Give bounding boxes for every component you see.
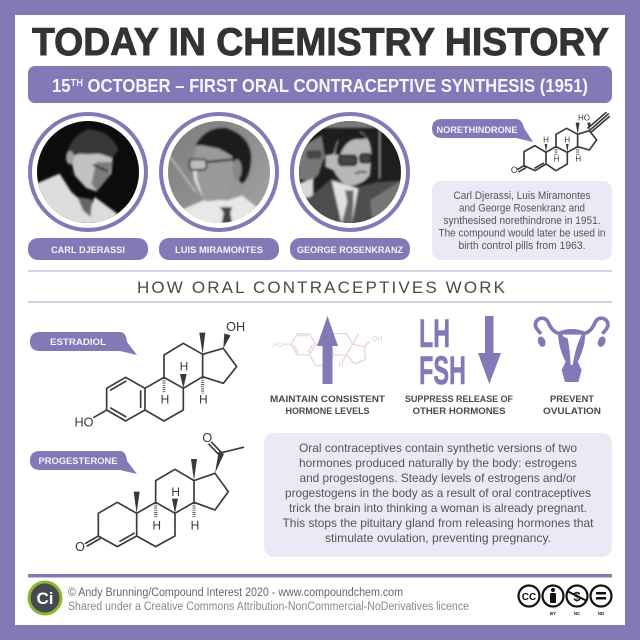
text block: synthesis summary: Carl Djerassi, Luis Miramontes [454,190,591,202]
icon: LH FSH with down arrow [419,312,501,393]
label: prevent ovulation [543,394,601,417]
text block: synthesis summary: birth control pills from 1963. [458,240,586,252]
molecule: estradiol: H [161,393,169,407]
molecule: estradiol: H [180,360,188,374]
icons: Creative Commons licence [518,586,612,616]
name label: George Rosenkranz: GEORGE ROSENKRANZ [297,245,403,256]
footer credits: Shared under a Creative Commons Attribution-NonCommercial-NoDerivatives licence [68,601,469,613]
label: maintain hormone levels: MAINTAIN CONSISTENT [270,394,385,405]
logo: Compound Interest [29,582,61,614]
text block: how oral contraceptives work: This stops the pituitary gland from releasing hormones that [282,516,594,530]
molecule: norethindrone: H [554,155,560,164]
icons: Creative Commons licence: NC [574,611,581,616]
divider [28,574,612,578]
name label: Luis Miramontes: LUIS MIRAMONTES [175,245,263,256]
banner: date and event: 15 [52,76,72,96]
molecule: estradiol: HO [75,415,94,429]
text block: how oral contraceptives work: progestogens in the body as a result of oral contraceptives [285,486,591,500]
molecule: progesterone: H [171,485,180,499]
icon: LH FSH with down arrow: LH [419,312,450,356]
banner: date and event: TH [71,78,83,89]
divider [28,270,612,272]
footer credits [68,587,469,613]
text block: synthesis summary: synthesised norethindrone in 1951. [444,215,600,227]
label: suppress other hormones [405,394,513,417]
portrait: Carl Djerassi [30,114,146,230]
name label: Luis Miramontes [159,238,279,260]
text block: synthesis summary [432,181,612,260]
icons: Creative Commons licence: $ [573,589,581,604]
text block: how oral contraceptives work: hormones produced naturally by the body: estrogens [299,456,577,470]
footer credits: © Andy Brunning/Compound Interest 2020 - www.compoundchem.com [68,587,403,599]
text block: how oral contraceptives work: stimulate ovulation, preventing pregnancy. [325,531,551,545]
label: suppress other hormones: SUPPRESS RELEASE OF [405,394,513,405]
molecule: progesterone: H [152,518,161,532]
molecule: norethindrone: O [511,165,518,175]
label: maintain hormone levels: HORMONE LEVELS [286,406,370,417]
molecule: norethindrone [511,113,609,175]
name label: Carl Djerassi: CARL DJERASSI [51,245,125,256]
icons: Creative Commons licence: ND [598,611,605,616]
icon: LH FSH with down arrow: FSH [419,349,466,393]
title: TODAY IN CHEMISTRY HISTORY [32,21,609,64]
label: prevent ovulation: OVULATION [543,406,601,417]
text block: how oral contraceptives work: trick the brain into thinking a woman is already pregnant. [289,501,587,515]
molecule: estradiol [75,320,245,429]
molecule: norethindrone: HO [578,114,590,123]
molecule: progesterone: O [75,540,85,554]
callout: estradiol label [30,332,137,355]
divider [28,301,612,303]
label: prevent ovulation: PREVENT [550,394,594,405]
molecule: norethindrone: H [564,136,570,145]
banner: date and event [28,66,612,103]
text block: synthesis summary: The compound would later be used in [438,228,606,240]
icons: Creative Commons licence: CC [522,592,536,603]
text block: how oral contraceptives work: and progestogens. Steady levels of estrogens and/or [300,471,576,485]
callout: norethindrone label: NORETHINDRONE [436,125,518,136]
icon: uterus [535,318,608,382]
molecule: norethindrone: H [543,136,549,145]
callout: progesterone label [30,451,137,474]
molecule: progesterone [75,431,243,554]
icon: faded hormone molecule with up arrow: OH [372,336,382,343]
banner: date and event: OCTOBER – FIRST ORAL CONTRACEPTIVE SYNTHESIS (1951) [83,76,588,96]
text block: how oral contraceptives work [264,433,612,557]
icon: faded hormone molecule with up arrow: HO [273,342,284,349]
label: suppress other hormones: OTHER HORMONES [412,406,506,417]
molecule: norethindrone: H [575,155,581,164]
icons: Creative Commons licence: BY [550,611,556,616]
portrait: George Rosenkranz [292,114,408,230]
text block: how oral contraceptives work: Oral contraceptives contain synthetic versions of two [299,441,577,455]
section heading: HOW ORAL CONTRACEPTIVES WORK [137,278,506,297]
callout: norethindrone label [432,119,533,142]
name label: George Rosenkranz [290,238,410,260]
logo: Compound Interest: Ci [36,589,54,608]
portrait: Luis Miramontes [161,114,277,230]
callout: progesterone label: PROGESTERONE [38,456,118,467]
molecule: progesterone: O [202,431,212,445]
icon: faded hormone molecule with up arrow [273,304,382,386]
molecule: progesterone: H [191,518,199,532]
callout: estradiol label: ESTRADIOL [50,337,106,348]
name label: Carl Djerassi [28,238,148,260]
icon: faded hormone molecule with up arrow: H [338,362,344,369]
text block: synthesis summary: and George Rosenkranz and [459,202,585,214]
label: maintain hormone levels [270,394,385,417]
molecule: estradiol: OH [226,320,245,334]
molecule: estradiol: H [199,393,208,407]
